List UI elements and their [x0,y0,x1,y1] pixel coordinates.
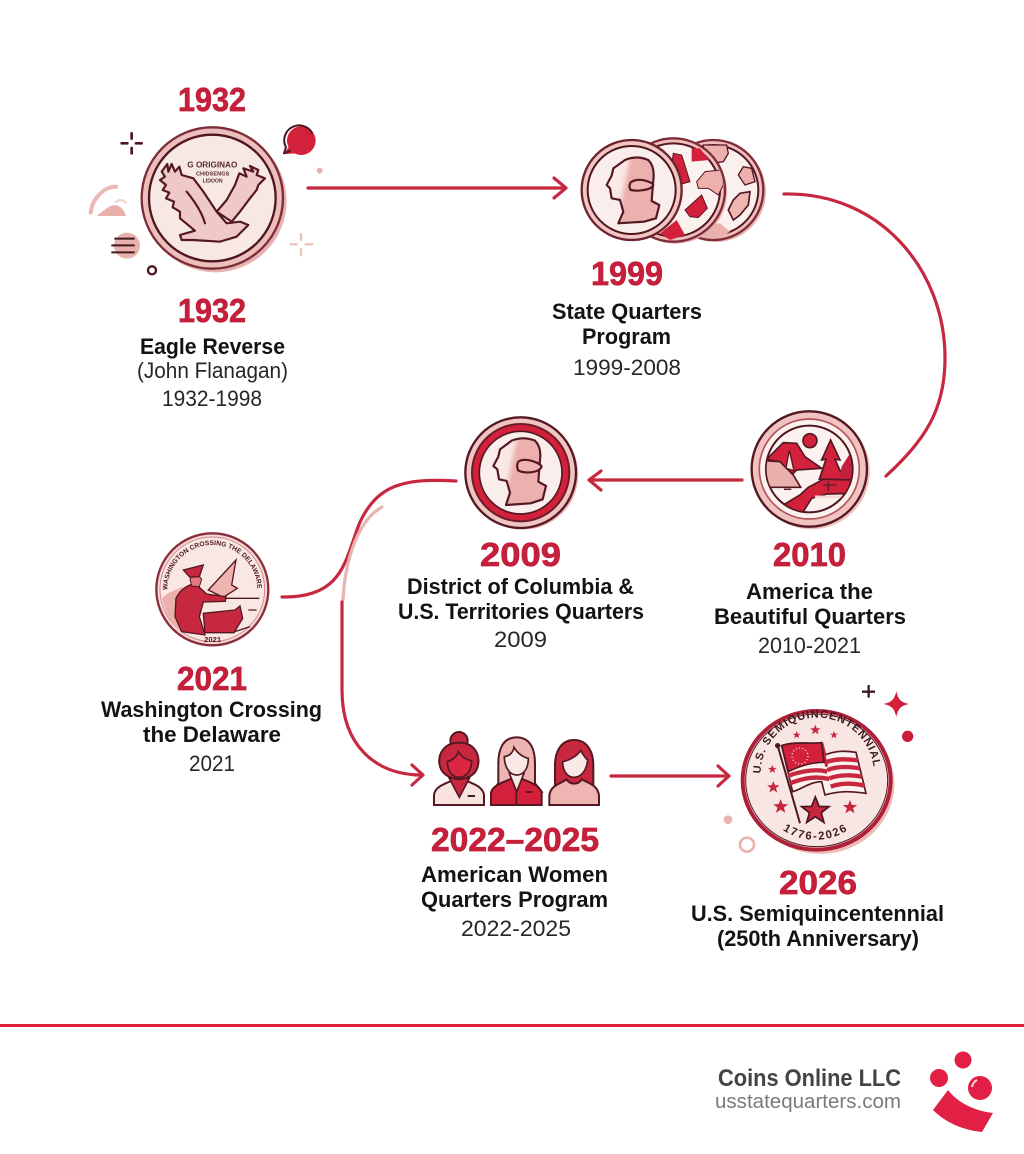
year label: 2009 [480,536,561,573]
connector: 2009 to 2021 [282,480,456,597]
date range: 1999-2008 [573,355,681,380]
title [714,579,906,629]
year label: 2026 [779,864,857,901]
panel: 1932 Eagle Reverse [91,81,323,411]
date range: 1932-1998 [162,386,262,411]
title: U.S. Territories Quarters [398,599,644,624]
coin: flag and stars: U.S. SEMIQUINCENTENNIAL [753,710,880,773]
title: State Quarters [552,299,702,324]
coin: crossing scene [155,532,270,646]
connector: pale branch [343,507,382,600]
date range: 2010-2021 [758,633,861,658]
title: Eagle Reverse [140,334,285,359]
title: Program [582,324,671,349]
woman with bun [434,732,484,805]
year label: 2022–2025 [431,821,599,858]
date: 2021 [189,751,235,776]
coin: crossing scene: 2021 [204,635,222,644]
date: 2009 [494,627,547,652]
brand name: Coins Online LLC [718,1065,901,1092]
date range: 2022-2025 [461,916,571,941]
panel: 2022-2025 American Women [421,732,608,941]
brand url: usstatequarters.com [715,1091,901,1113]
coins: three overlapping state coins [582,138,766,244]
baseline [434,803,599,807]
title: Quarters Program [421,887,608,912]
arrow: curved 1999 to 2010 [784,194,945,476]
footer rule [0,1024,1024,1027]
year label: 2021 [177,660,247,697]
icon: sparkles and dots [724,685,913,852]
year label: 1999 [591,255,663,292]
title: Washington Crossing [101,697,322,722]
coin: eagle: LIDOON [203,178,223,184]
panel: 2010 America the Beautiful [714,411,906,658]
woman with long hair [491,737,542,805]
icon: Washington bust [493,438,546,505]
panel: 2026 Semiquincentennial [691,685,944,951]
year label: 1932 [178,292,246,329]
icon: logo [930,1052,993,1132]
year above coin: 1932 [178,81,246,118]
coin: eagle: CHIDSENGS [196,171,230,177]
coin: landscape [752,411,870,529]
arrow: 2010 to 2009 [589,471,742,490]
title: the Delaware [143,722,281,747]
title: (250th Anniversary) [717,926,919,951]
icon: three women [434,732,599,805]
footer brand [715,1052,993,1132]
icon: decorative sparkles and bubble [91,125,323,274]
coin: flag and stars: 1776-2026 [783,824,846,840]
title [421,862,608,912]
title [101,697,322,747]
title [691,901,944,951]
designer: (John Flanagan) [137,358,288,383]
coin: flag and stars [724,685,914,854]
panel: 1999 State Quarters [552,138,766,380]
year label: 2010 [773,536,846,573]
title: America the [746,579,873,604]
title [552,299,702,349]
panel: 2009 District of Columbia [398,417,644,652]
icon: ribbon [517,460,542,472]
title [398,574,644,624]
coin: eagle: G ORIGINAO [187,160,237,169]
coin: red rim bust [465,417,578,530]
coin: crossing scene: WASHINGTON CROSSING THE DELAWARE [162,540,262,590]
panel: 2021 Washington Crossing [101,532,322,776]
arrow: 1932 to 1999 [308,178,566,198]
arrow: 2021 to 2022-2025 [342,602,423,785]
title: American Women [421,862,608,887]
coin: eagle [142,127,287,272]
title: Beautiful Quarters [714,604,906,629]
icon: Washington bust [607,157,659,223]
title: District of Columbia & [407,574,634,599]
title: U.S. Semiquincentennial [691,901,944,926]
woman with red hair [549,740,599,805]
arrow: 2022-2025 to 2026 [611,766,729,786]
